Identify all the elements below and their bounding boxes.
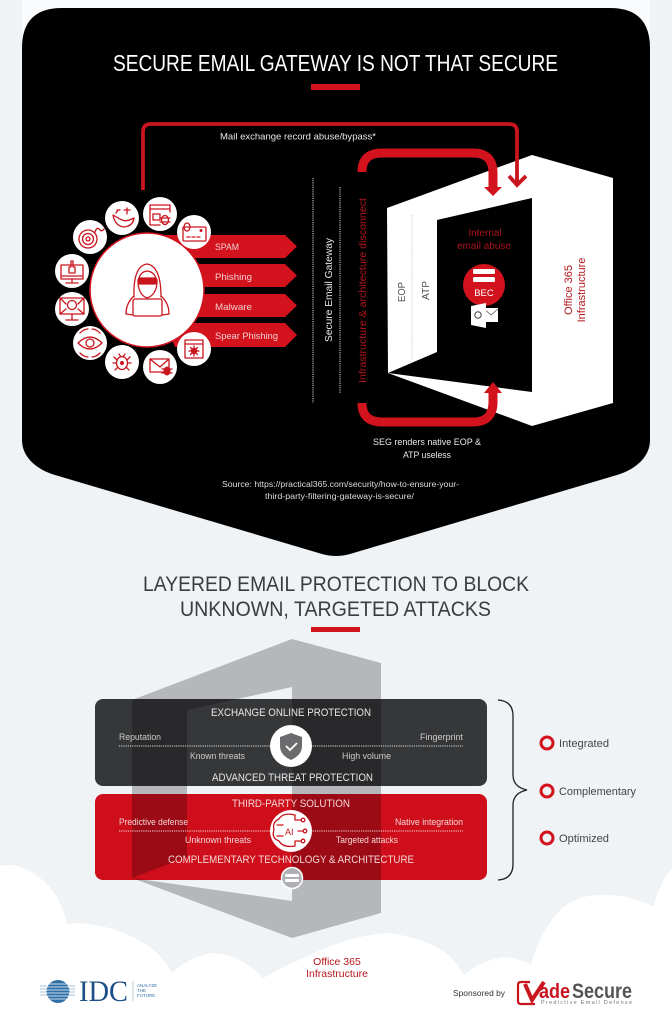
- panel: third party solution text: Native integration: [395, 817, 463, 827]
- heading: layered email protection: UNKNOWN, TARGETED ATTACKS: [180, 598, 491, 621]
- panel: exchange online protection text: Fingerprint: [420, 732, 463, 742]
- panel: microsoft layers: [95, 699, 487, 880]
- panel: exchange online protection text: Known threats: [190, 751, 245, 761]
- icon: monitor target: [55, 292, 89, 326]
- label: internal email abuse: [457, 228, 511, 252]
- icon: AI brain: AI: [285, 827, 294, 837]
- label: internal email abuse: Internal: [468, 228, 502, 239]
- arrow: top thick arrow: [362, 153, 502, 196]
- threat labels: SPAM: [215, 242, 239, 253]
- icon: eye: [73, 326, 107, 360]
- heading underline: [311, 627, 360, 632]
- icon: browser bug: [143, 197, 177, 231]
- label: infrastructure disconnect: Infrastructure & architecture disconnect: [357, 198, 369, 383]
- icon: shield: [270, 725, 312, 767]
- heading underline: [311, 84, 360, 90]
- panel: exchange online protection text: [119, 707, 463, 784]
- source note: [222, 480, 459, 501]
- label: office 365 infrastructure bottom: Infrastructure: [306, 968, 368, 980]
- panel: third party solution text: [119, 798, 463, 866]
- panel: third party solution text: COMPLEMENTARY TECHNOLOGY & ARCHITECTURE: [168, 854, 414, 866]
- panel: exchange online protection text: High volume: [342, 751, 391, 761]
- logo: vade secure: Predictive Email Defense: [541, 1000, 632, 1006]
- central hacker circle: [90, 233, 204, 347]
- icon: AI brain: [270, 810, 312, 852]
- icon: whale phishing: [105, 201, 139, 235]
- source note: third-party-filtering-gateway-is-secure/: [265, 492, 415, 501]
- icon: hacker: [126, 264, 169, 316]
- logo: IDC: [40, 975, 157, 1008]
- heading: layered email protection: LAYERED EMAIL PROTECTION TO BLOCK: [143, 573, 529, 596]
- office 365 grey shape: [132, 639, 381, 938]
- panel: exchange online protection text: ADVANCED THREAT PROTECTION: [212, 772, 373, 784]
- BEC badge: BEC: [474, 288, 494, 299]
- sponsored by: Sponsored by: [453, 988, 506, 998]
- logo: IDC: FUTURE: [137, 993, 155, 998]
- label: ATP: ATP: [421, 281, 432, 300]
- arrow: bottom thick arrow: [362, 382, 502, 422]
- icon: outlook: [471, 303, 498, 328]
- icon: card bug: [177, 215, 211, 249]
- dotted divider: gateway: [312, 178, 314, 403]
- panel: secure email gateway: [22, 8, 650, 556]
- threat labels: Phishing: [215, 272, 252, 283]
- label: secure email gateway: Secure Email Gateway: [323, 237, 335, 342]
- panel: exchange online protection text: Reputation: [119, 732, 161, 742]
- label: office 365 infrastructure bottom: [306, 956, 368, 980]
- dotted divider: disconnect: [339, 187, 341, 393]
- icon: mail bug: [143, 350, 177, 384]
- label: seg renders: SEG renders native EOP &: [373, 437, 482, 448]
- panel: exchange online protection text: EXCHANGE ONLINE PROTECTION: [211, 707, 371, 719]
- panel: third party solution text: Unknown threats: [185, 835, 251, 845]
- bracket: [498, 700, 527, 880]
- threat arrows: [165, 235, 297, 347]
- threat labels: Spear Phishing: [215, 331, 278, 342]
- logo: IDC: ANALYZE: [137, 983, 157, 988]
- benefit: optimized: Optimized: [559, 833, 609, 845]
- label: seg renders: [373, 437, 482, 461]
- icon: bug: [105, 345, 139, 379]
- panel: third party solution text: Targeted attacks: [336, 835, 398, 845]
- logo: IDC: IDC: [79, 975, 128, 1008]
- benefit: integrated: Integrated: [559, 738, 609, 750]
- logo: vade secure: [518, 980, 632, 1006]
- threat icon circles: [55, 197, 211, 384]
- heading: secure email gateway: SECURE EMAIL GATEWAY IS NOT THAT SECURE: [113, 50, 558, 76]
- source note: Source: https://practical365.com/security/how-to-ensure-your-: [222, 480, 459, 489]
- top white strip: [22, 0, 650, 40]
- icon: monitor upload: [55, 254, 89, 288]
- label: mail exchange: Mail exchange record abuse/bypass*: [220, 132, 376, 142]
- label: EOP: EOP: [397, 282, 408, 302]
- panel: third party solution text: THIRD-PARTY SOLUTION: [232, 798, 350, 810]
- benefits list: [541, 737, 636, 845]
- threat labels: Malware: [215, 302, 252, 313]
- heading: layered email protection: [143, 573, 529, 621]
- BEC badge: [463, 264, 505, 306]
- benefit: complementary: Complementary: [559, 786, 636, 798]
- label: office 365 infrastructure: [563, 258, 588, 322]
- logo: vade secure: Secure: [572, 980, 632, 1003]
- clouds background: [0, 865, 672, 1024]
- arrow: mail exchange bypass: [143, 124, 526, 190]
- label: internal email abuse: email abuse: [457, 241, 511, 252]
- logo: IDC: THE: [137, 988, 146, 993]
- threat labels: [215, 242, 278, 342]
- label: office 365 infrastructure: Office 365: [563, 265, 575, 315]
- icon: equals: [282, 868, 302, 888]
- icon: browser virus: [177, 332, 211, 366]
- label: seg renders: ATP useless: [403, 450, 451, 461]
- office 365 shape: [387, 155, 613, 426]
- label: office 365 infrastructure bottom: Office 365: [313, 956, 361, 968]
- black panel shape: [22, 8, 650, 556]
- panel: third party solution text: Predictive defense: [119, 817, 188, 827]
- logo: vade secure: ade: [539, 981, 570, 1003]
- icon: at bomb: [73, 220, 107, 254]
- label: office 365 infrastructure: Infrastructure: [576, 258, 588, 322]
